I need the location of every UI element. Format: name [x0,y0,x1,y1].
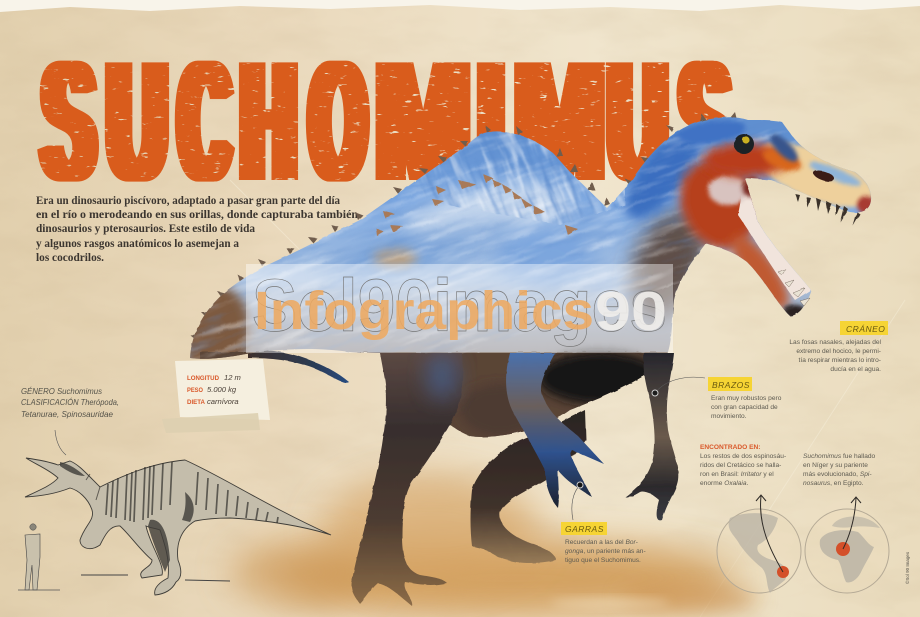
text: Suchomimus hallazgo: en Níger y su pariente [803,462,868,469]
label: garras: GARRAS [565,524,604,534]
intro text block: Era un dinosaurio piscívoro, adaptado a pasar gran parte del día [36,195,340,207]
sketch classification note [21,386,119,455]
nostril [812,168,836,184]
text: encontrado en: ron en Brasil: Irritator y el [700,471,774,478]
label: garras [561,482,646,564]
far arm with claws [625,353,678,520]
intro text block: y algunos rasgos anatómicos lo asemejan a [36,238,239,250]
title: O [311,26,365,217]
torso, neck and head base [190,117,871,437]
sketch: dinosaur size comparison [25,458,331,595]
title: S [43,26,94,217]
title: M [515,26,604,217]
tail lash [248,350,349,383]
title: I [479,26,503,217]
body shading clipped to silhouette [65,0,881,451]
label: garras: tiguo que el Suchomimus. [565,557,641,564]
watermark: 90 [595,280,667,342]
label: cráneo: tía respirar mientras lo intro- [799,357,881,364]
label: cráneo [789,321,888,373]
title: M [376,26,470,217]
data note card: DIETA [187,399,205,406]
watermark: Sol90images [252,264,667,347]
text: Suchomimus hallazgo [803,453,876,487]
label: brazos: movimiento. [711,413,747,420]
title: H [242,26,295,217]
intro text block [36,195,359,264]
globe: América [717,495,801,593]
data note card: carnívora [207,397,239,406]
label: cráneo: CRÁNEO [846,324,885,334]
ground dust [230,475,760,616]
near hind leg [351,353,463,606]
text: Suchomimus hallazgo: Suchomimus fue hallado [803,453,876,460]
data note card: PESO [187,387,203,394]
text: S [680,26,729,217]
data note card: 12 m [224,373,241,382]
title: U [108,26,166,217]
spines on back [190,112,737,340]
data note card [162,359,270,433]
sketch classification note: CLASIFICACIÓN Therópoda, [21,397,119,407]
intro text block: dinosaurios y pterosaurios. Este estilo de vida [36,223,255,235]
text: encontrado en [700,444,786,487]
title: U [609,26,666,217]
title [43,26,729,217]
intro text block: los cocodrilos. [36,252,104,264]
label: cráneo: Las fosas nasales, alejadas del [789,339,882,346]
far hind leg [470,410,586,563]
text: Suchomimus hallazgo: nosaurus, en Egipto. [803,480,864,487]
text: encontrado en: ridos del Cretácico se halla- [700,462,781,469]
label: brazos: BRAZOS [712,380,750,390]
label: garras: Recuerdan a las del Bor- [565,539,639,546]
sketch classification note: Tetanurae, Spinosauridae [21,410,113,419]
label: garras: gonga, un pariente más an- [565,548,646,555]
sketch: human figure [18,524,60,590]
text: encontrado en: ENCONTRADO EN: [700,444,760,451]
text: Suchomimus hallazgo: más evolucionado, Spi- [803,471,872,478]
eye [734,134,754,154]
label: brazos: Eran muy robustos pero [711,395,782,402]
watermark: Infographics [254,281,594,341]
near arm with claws [506,353,604,508]
intro text block: en el río o merodeando en sus orillas, donde capturaba también [36,209,359,221]
data note card: 5.000 kg [207,385,237,394]
dorsal scutes [376,174,578,236]
head colouring [666,116,881,319]
label: brazos: con gran capacidad de [711,404,778,411]
text: encontrado en: Los restos de dos espinosáu- [700,453,786,460]
globe: África [805,497,889,593]
data note card: LONGITUD [187,375,219,382]
thigh blue sheen [426,352,458,400]
title: C [180,26,229,217]
credit: ©Sol 90 Images [904,551,910,584]
dinosaur illustration [190,112,872,606]
label: brazos [652,377,782,420]
label: cráneo: extremo del hocico, le permi- [796,348,881,355]
text: encontrado en: enorme Oxalaia. [700,480,749,487]
label: cráneo: ducía en el agua. [830,366,881,373]
teeth [795,194,860,226]
sail ribs [420,131,626,225]
sketch classification note: GÉNERO Suchomimus [21,386,102,396]
